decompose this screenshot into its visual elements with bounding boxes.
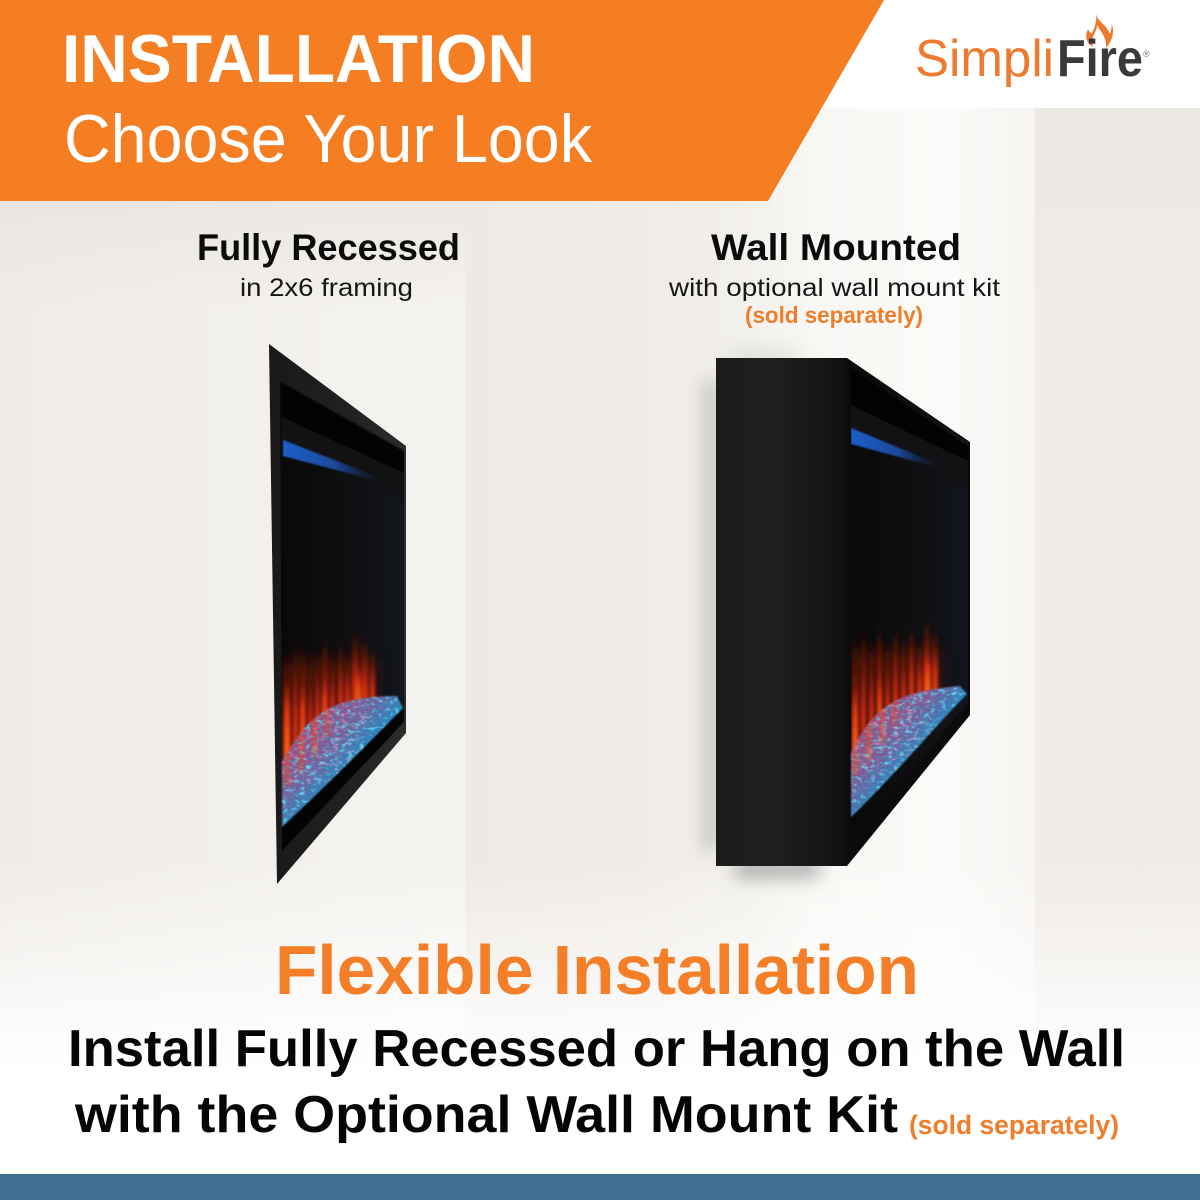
title: installation: INSTALLATION <box>62 21 535 97</box>
wall-mount box side <box>716 358 847 866</box>
body line 2: with the Optional Wall Mount Kit <box>74 1086 898 1144</box>
recessed flame reflection <box>285 705 329 785</box>
caption: with optional wall mount kit: with optional wall mount kit <box>668 274 1000 302</box>
caption: in 2x6 framing: in 2x6 framing <box>240 274 413 302</box>
white logo header panel <box>760 0 1200 108</box>
mounted screen <box>851 368 968 791</box>
mounted flame reflection <box>853 696 897 775</box>
headline: flexible installation: Flexible Installation <box>275 931 919 1009</box>
body line 1: Install Fully Recessed or Hang on the Wall <box>68 1020 1125 1078</box>
recessed glowing rock bed <box>280 694 405 829</box>
mounted frame <box>847 358 970 866</box>
caption: sold separately: (sold separately) <box>745 302 923 328</box>
recessed frame <box>269 344 406 884</box>
heading: wall mounted <box>668 227 1000 328</box>
subtitle: choose your look: Choose Your Look <box>64 101 593 177</box>
logo wordmark: ® <box>1143 49 1150 59</box>
orange title banner <box>0 0 884 201</box>
bottom blue bar <box>0 1174 1200 1200</box>
logo wordmark: Simpli <box>915 30 1054 88</box>
logo wordmark: Fire <box>1057 30 1143 88</box>
body text block <box>68 1020 1125 1144</box>
fireplace: fully recessed <box>269 344 406 884</box>
fireplace: wall mounted <box>704 354 970 876</box>
wall shadow <box>704 354 820 876</box>
heading: fully recessed <box>197 227 460 302</box>
recessed screen <box>280 381 404 851</box>
heading: wall mounted: Wall Mounted <box>711 227 961 268</box>
SimpliFire logo <box>915 14 1150 88</box>
logo flame icon <box>1086 14 1113 48</box>
logo wordmark <box>915 30 1150 88</box>
mounted glowing rock bed <box>850 684 968 819</box>
sold separately note: (sold separately) <box>909 1110 1119 1140</box>
heading: fully recessed: Fully Recessed <box>197 227 460 268</box>
